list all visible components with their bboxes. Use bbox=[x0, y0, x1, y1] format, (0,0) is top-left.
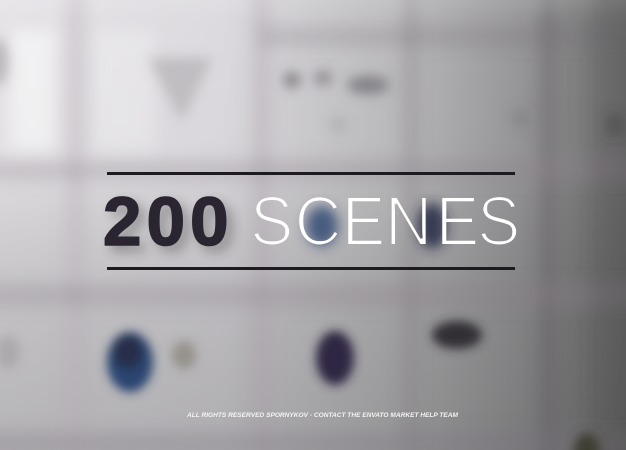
shadow of number: 200 bbox=[109, 189, 240, 266]
blurred shapes, top row bbox=[0, 38, 625, 137]
title block bbox=[103, 172, 520, 270]
top rule bbox=[107, 172, 515, 175]
bottom rule bbox=[107, 267, 515, 270]
blurred blobs, bottom row bbox=[0, 321, 600, 450]
footer copyright: ALL RIGHTS RESERVED SPORNYKOV - CONTACT THE ENVATO MARKET HELP TEAM bbox=[186, 412, 458, 419]
blurred blobs behind title bbox=[306, 203, 447, 249]
number 200: 200 bbox=[103, 183, 234, 260]
word SCENES: SCENES bbox=[250, 183, 520, 261]
